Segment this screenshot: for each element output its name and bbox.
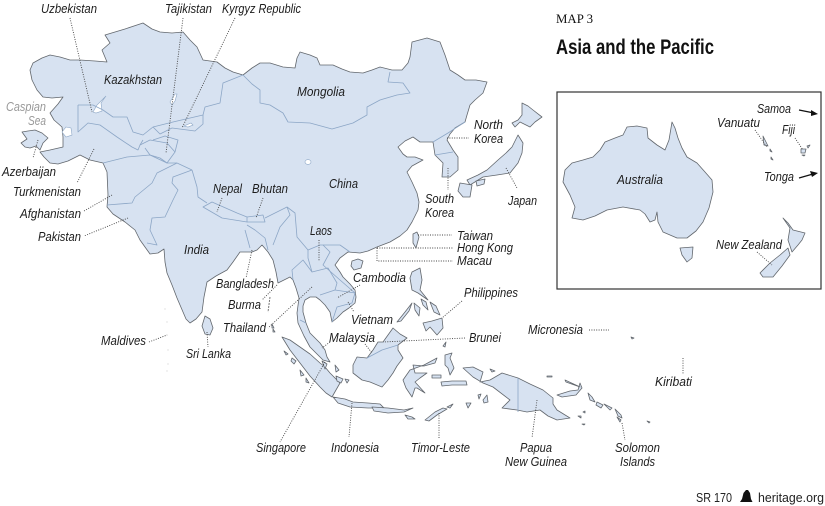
label: Macau: Macau [457,254,492,268]
label: Vietnam: Vietnam [351,313,393,327]
Caspian-side lakes and inland water [62,94,311,164]
label: Japan: Japan [507,194,537,208]
label: South Korea: South [425,192,454,206]
arrow: Samoa [799,110,818,116]
Tasmania [680,247,693,262]
label: Bangladesh: Bangladesh [216,277,274,291]
label: Indonesia: Indonesia [331,441,379,455]
Korea and internal country borders [78,72,518,412]
label: Mongolia: Mongolia [297,85,345,99]
Taiwan [413,232,419,248]
label: Uzbekistan: Uzbekistan [41,2,97,16]
label: Australia: Australia [616,173,663,187]
Sulawesi [403,358,437,397]
label: Caspian: Caspian [6,100,46,114]
New Zealand [783,218,805,252]
main map: Asia landmass and islands [21,23,650,425]
label: Turkmenistan: Turkmenistan [13,185,81,199]
Maldives faint dots [164,308,169,372]
Hainan [351,259,363,270]
label: Bhutan: Bhutan [252,182,288,196]
icon: Liberty Bell [740,490,752,502]
report number: SR 170 [696,491,732,505]
label: Sea: Sea [28,114,46,128]
Japan [512,103,542,127]
label: Azerbaijan: Azerbaijan [1,165,56,179]
label: Tonga: Tonga [764,170,794,184]
label: Singapore: Singapore [256,441,306,455]
Sumatra [282,337,340,397]
label: Solomon Islands: Solomon [615,441,660,455]
Vanuatu and Fiji islands [763,136,810,160]
label: Tajikistan: Tajikistan [165,2,212,16]
country labels: Islands [620,455,655,469]
Azerbaijan [21,130,48,150]
heading: Asia and the Pacific [556,36,714,59]
site name: heritage.org [758,491,824,505]
leader lines [33,18,683,442]
country labels: Korea [474,132,503,146]
inset leader lines [755,130,803,265]
Sumatra outer islands [272,324,349,383]
Borneo [353,328,407,387]
label: Timor-Leste: Timor-Leste [411,441,470,455]
Australia [563,122,713,238]
label: Brunei: Brunei [469,331,502,345]
mainland [30,23,487,362]
title block [556,12,714,59]
New Guinea [463,367,570,420]
inset panel: Australia and the Pacific [557,92,821,289]
label: India: India [184,243,209,257]
label: Maldives: Maldives [101,334,146,348]
label: Kazakhstan: Kazakhstan [104,73,162,87]
label: Samoa: Samoa [757,102,791,116]
Philippines [397,268,443,335]
label: North Korea: North [474,118,503,132]
label: Taiwan: Taiwan [457,229,493,243]
country labels: New Guinea [505,455,567,469]
label: Fiji: Fiji [782,123,796,137]
source footer [696,490,824,505]
label: Pakistan: Pakistan [38,230,81,244]
label: Philippines: Philippines [464,286,518,300]
label: Micronesia: Micronesia [528,323,583,337]
Java and Lesser Sunda Islands [333,397,471,421]
label: China: China [329,177,358,191]
label: Kiribati: Kiribati [655,375,693,389]
label: New Zealand: New Zealand [716,238,783,252]
label: Nepal: Nepal [213,182,243,196]
map number: MAP 3 [556,12,593,26]
country labels: Korea [425,206,454,220]
label: Laos: Laos [310,224,332,238]
label: Cambodia: Cambodia [353,271,406,285]
label: Thailand: Thailand [223,321,267,335]
label: Sri Lanka: Sri Lanka [186,347,231,361]
Moluccas and nearby islands [432,342,552,403]
inset frame [557,92,821,289]
label: Hong Kong: Hong Kong [457,241,513,255]
Sri Lanka [202,316,213,335]
label: Papua New Guinea: Papua [520,441,552,455]
arrow: Tonga [799,171,818,178]
label: Malaysia: Malaysia [329,331,375,345]
label: Afghanistan: Afghanistan [19,207,81,221]
label: Kyrgyz Republic: Kyrgyz Republic [222,2,302,16]
label: Burma: Burma [228,298,261,312]
label: Vanuatu: Vanuatu [717,116,760,130]
Papua New Guinea islands and Solomon Islands [557,337,650,425]
